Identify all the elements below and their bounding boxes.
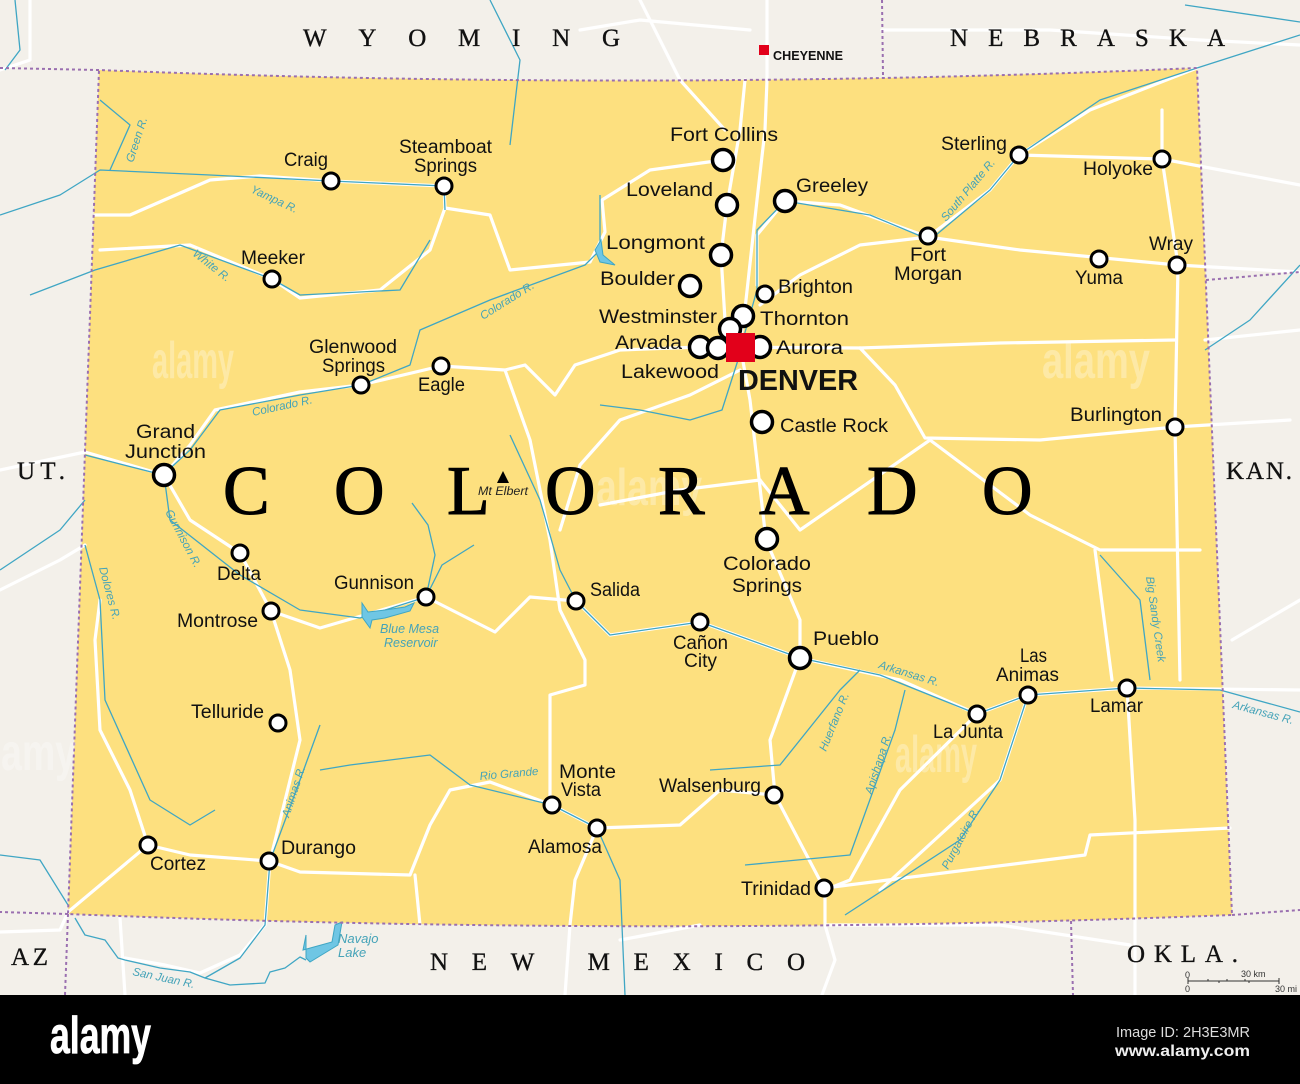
city: Steamboat Springs bbox=[399, 137, 493, 194]
city: Denver: DENVER bbox=[738, 365, 858, 397]
city: Wray bbox=[1149, 234, 1193, 273]
title: Colorado: COLORADO bbox=[223, 453, 1033, 530]
city: Las Animas: Animas bbox=[996, 665, 1059, 686]
footer url: www.alamy.com bbox=[1114, 1043, 1250, 1060]
neighbouring state labels: NEBRASKA bbox=[950, 25, 1225, 52]
city: Steamboat Springs: Steamboat bbox=[399, 137, 493, 158]
city: Eagle: Eagle bbox=[418, 375, 465, 396]
city: Arvada bbox=[615, 333, 710, 358]
city: Loveland: Loveland bbox=[626, 180, 713, 201]
watermarks: alamy bbox=[596, 459, 702, 517]
city: Yuma: Yuma bbox=[1075, 268, 1123, 289]
city: Sterling bbox=[941, 134, 1027, 163]
river labels: White R. bbox=[190, 248, 232, 285]
city: Cañon City: City bbox=[684, 651, 717, 672]
footer logo: alamy bbox=[50, 1007, 151, 1065]
city: Greeley bbox=[774, 176, 869, 212]
city: Durango bbox=[261, 838, 356, 869]
city: Las Animas: Las bbox=[1020, 646, 1047, 667]
scale bar: 30 mi bbox=[1275, 984, 1297, 994]
scale bar: 0 bbox=[1185, 984, 1190, 994]
city: Longmont bbox=[606, 233, 732, 266]
river labels: Big Sandy Creek bbox=[1143, 576, 1167, 664]
city: Monte Vista: Monte bbox=[559, 762, 616, 783]
city: Boulder: Boulder bbox=[600, 269, 676, 290]
neighbouring state labels: KAN. bbox=[1226, 458, 1292, 485]
city: Aurora: Aurora bbox=[776, 338, 844, 359]
city: Fort Morgan: Fort bbox=[910, 245, 947, 266]
city: Fort Collins bbox=[670, 125, 778, 170]
city: Lakewood bbox=[621, 338, 728, 383]
city: Durango: Durango bbox=[281, 838, 356, 859]
river labels: San Juan R. bbox=[131, 966, 196, 991]
city: Salida bbox=[568, 580, 640, 609]
city: Monte Vista: Vista bbox=[561, 780, 601, 801]
watermarks bbox=[0, 332, 1150, 784]
footer image id: Image ID: 2H3E3MR bbox=[1116, 1025, 1250, 1041]
city: Lakewood: Lakewood bbox=[621, 362, 719, 383]
city outside state: Cheyenne: CHEYENNE bbox=[773, 48, 843, 63]
lake: Granby bbox=[595, 240, 615, 265]
city: La Junta: La Junta bbox=[933, 722, 1003, 743]
neighbouring state labels: AZ bbox=[11, 944, 48, 971]
city: Brighton: Brighton bbox=[778, 277, 853, 298]
city: Fort Morgan: Morgan bbox=[894, 264, 962, 285]
city: Greeley: Greeley bbox=[796, 176, 869, 197]
city: Boulder bbox=[600, 269, 700, 296]
city: Wray: Wray bbox=[1149, 234, 1193, 255]
city: Alamosa bbox=[528, 820, 605, 858]
city: Cañon City bbox=[673, 614, 728, 672]
city: Arvada: Arvada bbox=[615, 333, 682, 354]
city: Fort Morgan bbox=[894, 228, 962, 285]
city: Lamar: Lamar bbox=[1090, 696, 1144, 717]
city: Monte Vista bbox=[544, 762, 616, 813]
river labels: Arkansas R. bbox=[1230, 699, 1295, 727]
city: Colorado Springs bbox=[723, 528, 811, 597]
river labels: Blue Mesa bbox=[380, 622, 439, 636]
city outside state: Cheyenne bbox=[759, 45, 843, 63]
river labels: Purgatoire R. bbox=[940, 806, 982, 871]
river labels: Animas R. bbox=[280, 765, 308, 820]
river labels: Colorado R. bbox=[251, 394, 314, 419]
river labels: Apishapa R. bbox=[863, 733, 894, 797]
river labels: Arkansas R. bbox=[876, 659, 941, 689]
city: Colorado Springs: Springs bbox=[732, 576, 802, 597]
city: Las Animas bbox=[996, 646, 1059, 703]
city: Telluride bbox=[191, 702, 286, 731]
city: Colorado Springs: Colorado bbox=[723, 554, 811, 575]
city: Westminster bbox=[599, 307, 740, 340]
neighbouring state labels: OKLA. bbox=[1127, 941, 1238, 968]
city: Cañon City: Cañon bbox=[673, 633, 728, 654]
neighbouring state labels: WYOMING bbox=[303, 25, 620, 52]
scale bar: 30 km bbox=[1241, 969, 1266, 979]
city: Meeker: Meeker bbox=[241, 248, 306, 269]
city: Loveland bbox=[626, 180, 738, 216]
city: Montrose bbox=[177, 603, 279, 632]
city: Sterling: Sterling bbox=[941, 134, 1007, 155]
city: Glenwood Springs: Springs bbox=[322, 356, 385, 377]
state: Colorado bbox=[68, 68, 1232, 926]
city: Longmont: Longmont bbox=[606, 233, 706, 254]
city: Fort Collins: Fort Collins bbox=[670, 125, 778, 146]
city: Grand Junction: Grand bbox=[136, 422, 195, 443]
city: Aurora bbox=[750, 336, 844, 359]
river labels: South Platte R. bbox=[939, 157, 998, 224]
city: Montrose: Montrose bbox=[177, 611, 258, 632]
scale bar bbox=[1185, 969, 1297, 994]
city: Denver bbox=[726, 333, 858, 397]
city: Gunnison bbox=[334, 573, 434, 605]
city: Craig bbox=[284, 150, 339, 189]
city: Pueblo bbox=[790, 629, 879, 668]
peak: Mt Elbert: Mt Elbert bbox=[478, 486, 529, 498]
city: Brighton bbox=[757, 277, 853, 302]
city: Meeker bbox=[241, 248, 306, 287]
footer bar bbox=[0, 995, 1300, 1084]
city: Holyoke bbox=[1083, 151, 1170, 180]
city: Walsenburg bbox=[659, 776, 782, 803]
city: Thornton bbox=[732, 306, 849, 330]
city: Holyoke: Holyoke bbox=[1083, 159, 1153, 180]
city: Trinidad: Trinidad bbox=[741, 879, 811, 900]
river labels: Reservoir bbox=[384, 636, 438, 650]
city: Alamosa: Alamosa bbox=[528, 837, 602, 858]
city: Delta bbox=[217, 545, 261, 585]
scale bar: 0 bbox=[1185, 970, 1190, 980]
city: Thornton: Thornton bbox=[760, 309, 849, 330]
river labels: Green R. bbox=[124, 116, 150, 164]
city: Cortez bbox=[140, 837, 206, 875]
city: Lamar bbox=[1090, 680, 1144, 717]
city: Burlington bbox=[1070, 405, 1183, 435]
river labels: Lake bbox=[338, 945, 366, 960]
city: Telluride: Telluride bbox=[191, 702, 264, 723]
city: Burlington: Burlington bbox=[1070, 405, 1162, 426]
river labels: Yampa R. bbox=[249, 184, 299, 216]
peak: Mt Elbert bbox=[478, 471, 529, 498]
city: Yuma bbox=[1075, 251, 1123, 289]
river labels: Huerfano R. bbox=[818, 691, 852, 753]
river labels: Gunnison R. bbox=[162, 508, 203, 570]
river labels bbox=[96, 116, 1295, 991]
city: Steamboat Springs: Springs bbox=[414, 156, 477, 177]
city: Gunnison: Gunnison bbox=[334, 573, 414, 594]
city: Pueblo: Pueblo bbox=[813, 629, 879, 650]
river labels: Rio Grande bbox=[479, 766, 539, 783]
city: Westminster: Westminster bbox=[599, 307, 718, 328]
lake: Navajo Lake bbox=[303, 922, 342, 962]
river labels: Colorado R. bbox=[478, 280, 537, 323]
city: Eagle bbox=[418, 358, 465, 396]
neighbouring state labels: NEW MEXICO bbox=[430, 949, 805, 976]
city: Cortez: Cortez bbox=[150, 854, 206, 875]
river labels: Navajo bbox=[338, 931, 378, 946]
city: Grand Junction: Junction bbox=[125, 442, 206, 463]
city: Grand Junction bbox=[125, 422, 206, 486]
city: Glenwood Springs: Glenwood bbox=[309, 337, 397, 358]
watermarks: alamy bbox=[152, 332, 234, 390]
city: Salida: Salida bbox=[590, 580, 640, 601]
river labels: Dolores R. bbox=[96, 566, 122, 621]
city: Castle Rock: Castle Rock bbox=[780, 416, 889, 437]
city: Glenwood Springs bbox=[309, 337, 397, 393]
lake: Blue Mesa Reservoir bbox=[362, 603, 414, 628]
watermarks: alamy bbox=[1042, 332, 1150, 390]
city: Castle Rock bbox=[752, 412, 889, 437]
city: Delta: Delta bbox=[217, 564, 261, 585]
neighbouring state labels: UT. bbox=[17, 458, 65, 485]
city: Walsenburg: Walsenburg bbox=[659, 776, 761, 797]
city: Craig: Craig bbox=[284, 150, 328, 171]
city: La Junta bbox=[933, 706, 1003, 743]
watermarks: alamy bbox=[895, 726, 977, 784]
